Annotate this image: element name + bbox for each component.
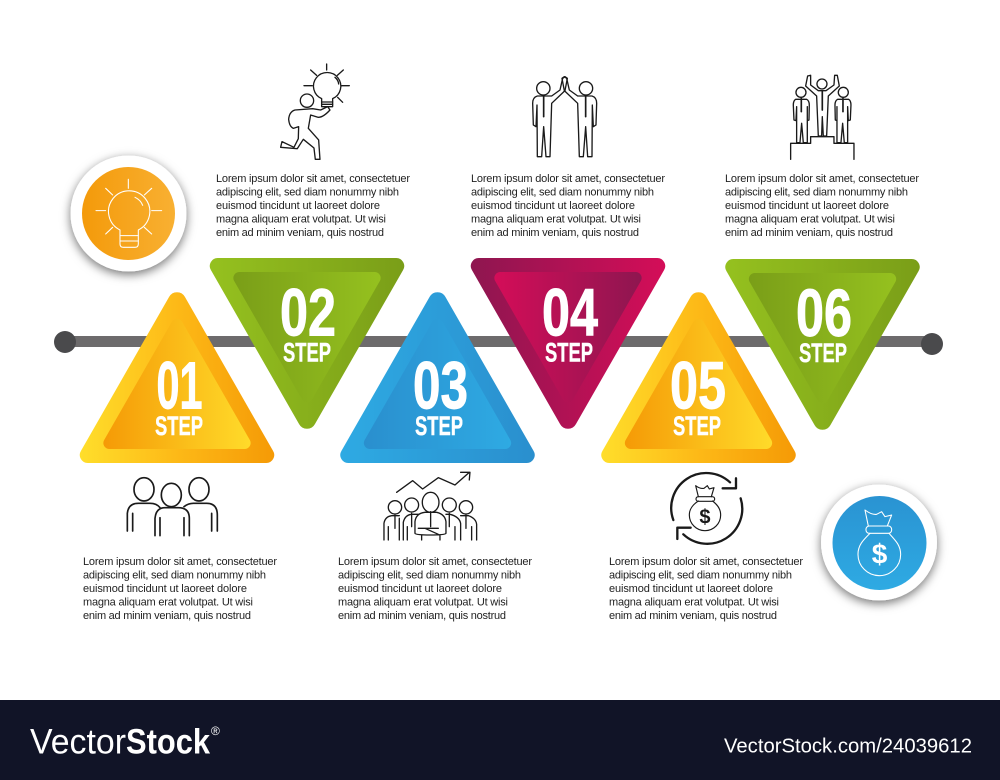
text block: step 01 xyxy=(83,556,277,622)
text block: step 04: enim ad minim veniam, quis nostrud xyxy=(471,227,639,239)
timeline line xyxy=(54,331,943,355)
text block: step 02: enim ad minim veniam, quis nostrud xyxy=(216,227,384,239)
text block: step 06 xyxy=(725,173,919,239)
text block: step 03: magna aliquam erat volutpat. Ut wisi xyxy=(338,596,508,608)
icon: podium winners xyxy=(791,75,854,159)
text block: step 01: euismod tincidunt ut laoreet dolore xyxy=(83,583,247,595)
text block: step 03: Lorem ipsum dolor sit amet, consectetuer xyxy=(338,556,532,568)
icon: money bag with cycle arrows xyxy=(671,473,742,544)
text block: step 05: enim ad minim veniam, quis nostrud xyxy=(609,610,777,622)
step 02 triangle xyxy=(210,258,404,429)
text block: step 03: adipiscing elit, sed diam nonummy nibh xyxy=(338,570,521,582)
text block: step 06: enim ad minim veniam, quis nostrud xyxy=(725,227,893,239)
footer bar: Stock xyxy=(126,722,210,762)
step 02 triangle: STEP xyxy=(283,338,331,368)
text block: step 01: magna aliquam erat volutpat. Ut wisi xyxy=(83,596,253,608)
step 01 triangle: 01 xyxy=(156,348,202,424)
text block: step 02 xyxy=(216,173,410,239)
badge: money bag: $ xyxy=(872,538,888,570)
step 06 triangle: 06 xyxy=(796,276,852,351)
text block: step 06: euismod tincidunt ut laoreet dolore xyxy=(725,200,889,212)
text block: step 02: Lorem ipsum dolor sit amet, consectetuer xyxy=(216,173,410,185)
text block: step 05: magna aliquam erat volutpat. Ut wisi xyxy=(609,596,779,608)
text block: step 06: magna aliquam erat volutpat. Ut wisi xyxy=(725,214,895,226)
text block: step 01: adipiscing elit, sed diam nonummy nibh xyxy=(83,570,266,582)
icon: high five xyxy=(533,77,597,157)
text block: step 06: Lorem ipsum dolor sit amet, consectetuer xyxy=(725,173,919,185)
text block: step 06: adipiscing elit, sed diam nonummy nibh xyxy=(725,186,908,198)
text block: step 03: enim ad minim veniam, quis nostrud xyxy=(338,610,506,622)
text block: step 05: adipiscing elit, sed diam nonummy nibh xyxy=(609,570,792,582)
step 05 triangle: 05 xyxy=(670,348,726,424)
text block: step 01: Lorem ipsum dolor sit amet, consectetuer xyxy=(83,556,277,568)
step 01 triangle: STEP xyxy=(155,411,203,441)
text block: step 01: enim ad minim veniam, quis nostrud xyxy=(83,610,251,622)
step 04 triangle xyxy=(471,258,665,429)
footer bar: ® xyxy=(211,724,220,738)
text block: step 02: euismod tincidunt ut laoreet dolore xyxy=(216,200,380,212)
text block: step 02: magna aliquam erat volutpat. Ut wisi xyxy=(216,214,386,226)
step 04 triangle: 04 xyxy=(542,276,598,350)
icon: team with growth arrow xyxy=(384,472,477,540)
step 05 triangle xyxy=(601,292,796,463)
text block: step 05: euismod tincidunt ut laoreet dolore xyxy=(609,583,773,595)
text block: step 03 xyxy=(338,556,532,622)
text block: step 05: Lorem ipsum dolor sit amet, consectetuer xyxy=(609,556,803,568)
step 05 triangle: STEP xyxy=(673,411,721,441)
step 03 triangle: STEP xyxy=(415,411,463,441)
badge: light bulb xyxy=(70,156,186,272)
text block: step 04: Lorem ipsum dolor sit amet, consectetuer xyxy=(471,173,665,185)
step 02 triangle: 02 xyxy=(280,276,336,350)
text block: step 04: euismod tincidunt ut laoreet dolore xyxy=(471,200,635,212)
step 06 triangle: STEP xyxy=(799,338,847,368)
step 06 triangle xyxy=(725,259,920,430)
text block: step 05 xyxy=(609,556,803,622)
step 04 triangle: STEP xyxy=(545,338,593,368)
icon: runner with bulb xyxy=(281,64,349,159)
footer bar: VectorStock.com/24039612 xyxy=(724,736,972,758)
text block: step 04: magna aliquam erat volutpat. Ut wisi xyxy=(471,214,641,226)
badge: money bag xyxy=(821,484,937,600)
text block: step 02: adipiscing elit, sed diam nonummy nibh xyxy=(216,186,399,198)
step 03 triangle: 03 xyxy=(413,348,468,424)
step 03 triangle xyxy=(340,292,535,463)
footer bar xyxy=(0,700,1000,780)
text block: step 04: adipiscing elit, sed diam nonummy nibh xyxy=(471,186,654,198)
step 01 triangle xyxy=(80,292,274,463)
icon: money bag with cycle arrows: $ xyxy=(699,506,711,528)
footer bar: Vector xyxy=(30,722,126,762)
text block: step 04 xyxy=(471,173,665,239)
text block: step 03: euismod tincidunt ut laoreet dolore xyxy=(338,583,502,595)
icon: group of three people xyxy=(127,478,217,536)
